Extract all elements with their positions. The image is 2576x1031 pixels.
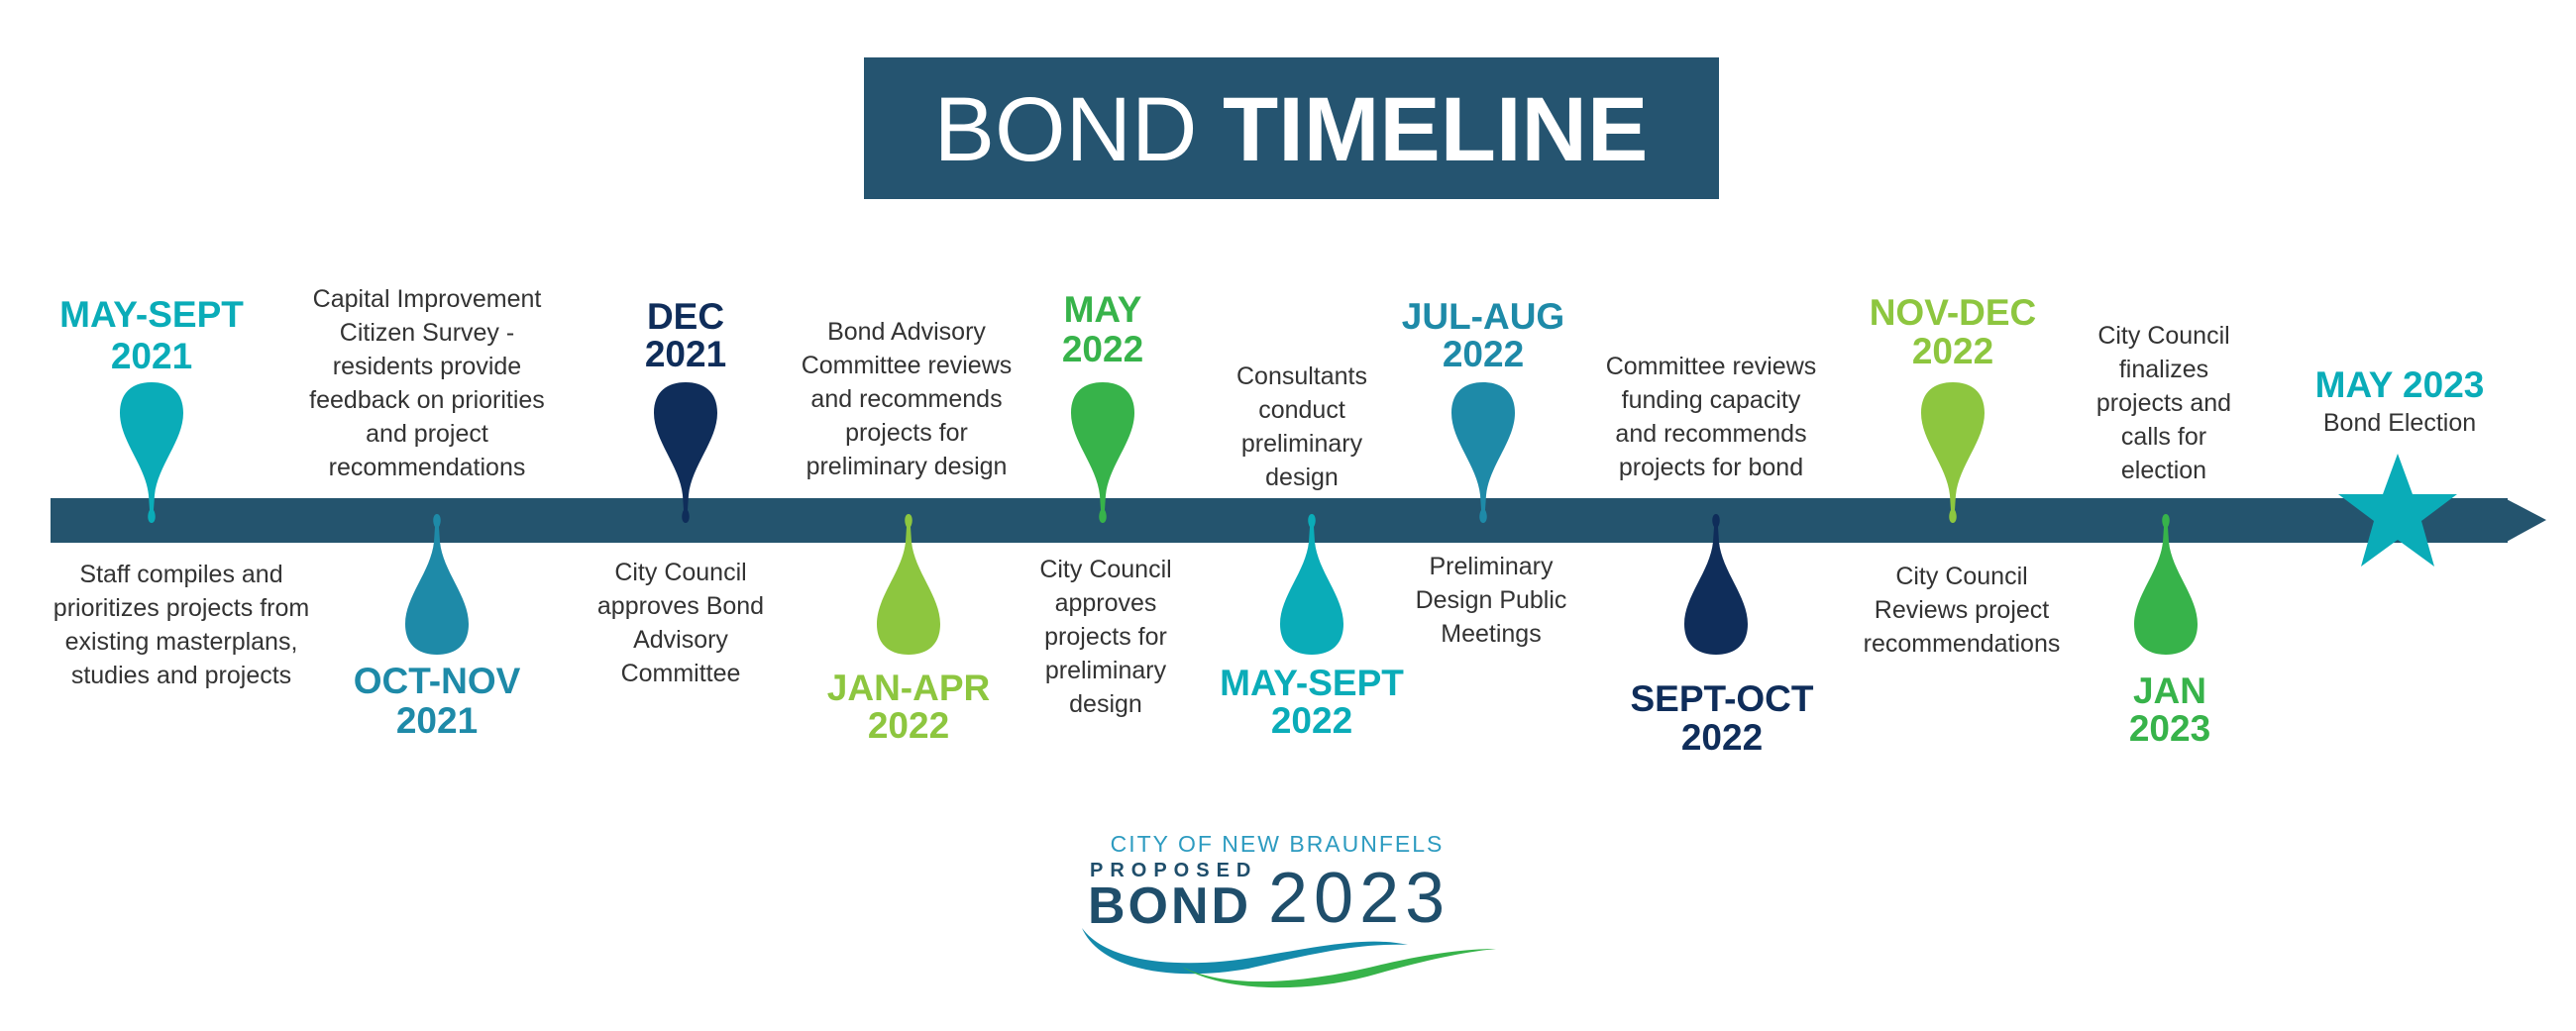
logo: Proposed Bond 2023 [1082, 831, 1496, 987]
milestone: Dec 2021: Advisory [633, 626, 728, 654]
milestone: Jul-Aug 2022: Design Public [1416, 586, 1566, 614]
milestone: May-Sept 2021: 2021 [111, 336, 192, 376]
milestone: Oct-Nov 2021: feedback on priorities [309, 386, 545, 414]
milestone: Jan-Apr 2022: and recommends [810, 385, 1003, 413]
title [864, 57, 1719, 199]
milestone: May-Sept 2022: 2022 [1271, 700, 1352, 741]
milestone: Jan 2023 [2096, 322, 2231, 749]
milestone: Jan 2023: 2023 [2129, 708, 2210, 749]
milestone: Sept-Oct 2022: and recommends [1615, 420, 1807, 448]
milestone: May 2022: 2022 [1062, 329, 1143, 369]
milestone: May 2022: City Council [1039, 556, 1172, 583]
milestone: Jan 2023: calls for [2121, 423, 2206, 451]
milestone: Jan-Apr 2022: projects for [845, 419, 968, 447]
milestone: Dec 2021 [597, 296, 764, 687]
milestone: May-Sept 2022: conduct [1258, 396, 1345, 424]
logo: Proposed Bond 2023: BOND [1088, 877, 1251, 935]
milestone: Jan 2023: projects and [2096, 389, 2231, 417]
milestone: Sept-Oct 2022: Committee reviews [1606, 353, 1816, 380]
milestone: Jan 2023: finalizes [2119, 356, 2208, 383]
milestone: May-Sept 2021: prioritizes projects from [54, 594, 309, 622]
milestone: Nov-Dec 2022: Reviews project [1875, 596, 2049, 624]
milestone: May 2022: projects for [1044, 623, 1167, 651]
milestone: May-Sept 2021: existing masterplans, [65, 628, 297, 656]
milestone: Nov-Dec 2022 [1864, 292, 2060, 658]
milestone: Sept-Oct 2022: SEPT-OCT [1630, 678, 1814, 719]
milestone: Jan-Apr 2022: Bond Advisory [827, 318, 986, 346]
milestone: Jul-Aug 2022: Meetings [1441, 620, 1542, 648]
milestone: Jan 2023: City Council [2097, 322, 2230, 350]
milestone: Dec 2021: Committee [621, 660, 740, 687]
milestone: May-Sept 2021 [54, 294, 309, 689]
milestone: May 2022: design [1069, 690, 1142, 718]
milestone: Oct-Nov 2021: recommendations [329, 454, 525, 481]
milestone: Jul-Aug 2022: 2022 [1443, 334, 1524, 374]
milestone: Jan-Apr 2022: JAN-APR [827, 668, 990, 708]
milestone: Oct-Nov 2021: OCT-NOV [354, 661, 521, 701]
logo: Proposed Bond 2023: 2023 [1268, 859, 1450, 938]
milestone: Dec 2021: 2021 [645, 334, 726, 374]
logo: Proposed Bond 2023: CITY OF NEW BRAUNFELS [1111, 831, 1444, 857]
milestone: Sept-Oct 2022 [1606, 353, 1816, 758]
milestone: Nov-Dec 2022: City Council [1895, 563, 2028, 590]
milestone: Nov-Dec 2022: NOV-DEC [1870, 292, 2036, 333]
milestone: May 2023 bond election: MAY 2023 [2315, 364, 2484, 405]
milestone: May-Sept 2022: MAY-SEPT [1220, 663, 1404, 703]
icon: star [2338, 454, 2457, 567]
milestone: Jul-Aug 2022: Preliminary [1429, 553, 1554, 580]
milestone: May-Sept 2022: design [1265, 464, 1339, 491]
milestone: Oct-Nov 2021: residents provide [333, 353, 521, 380]
milestone: Dec 2021: DEC [647, 296, 724, 337]
milestone: Oct-Nov 2021: 2021 [396, 700, 478, 741]
milestone: Oct-Nov 2021: and project [366, 420, 488, 448]
milestone: Jan-Apr 2022: 2022 [868, 705, 949, 746]
logo: Proposed Bond 2023: PROPOSED [1090, 860, 1257, 881]
milestone: Jul-Aug 2022: JUL-AUG [1402, 296, 1564, 337]
milestone: Jan-Apr 2022: preliminary design [806, 453, 1007, 480]
milestone: May-Sept 2022: preliminary [1241, 430, 1363, 458]
milestone: Dec 2021: City Council [614, 559, 747, 586]
milestone: May 2023 bond election: Bond Election [2323, 409, 2476, 437]
milestone: Jul-Aug 2022 [1402, 296, 1566, 648]
milestone: May 2022: preliminary [1045, 657, 1167, 684]
milestone: May-Sept 2021: studies and projects [71, 662, 291, 689]
title: BOND TIMELINE [934, 79, 1648, 180]
milestone: Jan-Apr 2022 [802, 318, 1012, 746]
milestone: May 2022: approves [1055, 589, 1156, 617]
milestone: May-Sept 2022 [1220, 362, 1404, 741]
milestone: Nov-Dec 2022: recommendations [1864, 630, 2060, 658]
milestone: May 2022 [1039, 289, 1172, 718]
timeline bar arrow [51, 498, 2546, 543]
milestone: May 2022: MAY [1064, 289, 1142, 330]
milestone: May-Sept 2022: Consultants [1236, 362, 1367, 390]
milestone: Jan-Apr 2022: Committee reviews [802, 352, 1012, 379]
milestone: Sept-Oct 2022: projects for bond [1619, 454, 1803, 481]
milestone: Sept-Oct 2022: funding capacity [1622, 386, 1801, 414]
milestone: Jan 2023: JAN [2133, 670, 2206, 711]
milestone: Oct-Nov 2021 [309, 285, 545, 741]
milestone: Oct-Nov 2021: Capital Improvement [313, 285, 541, 313]
milestone: Oct-Nov 2021: Citizen Survey - [340, 319, 514, 347]
milestone: May-Sept 2021: MAY-SEPT [59, 294, 244, 335]
milestone: Sept-Oct 2022: 2022 [1681, 717, 1763, 758]
milestone: May-Sept 2021: Staff compiles and [79, 561, 283, 588]
milestone: May 2023 bond election [2315, 364, 2484, 567]
milestone: Dec 2021: approves Bond [597, 592, 764, 620]
milestone: Nov-Dec 2022: 2022 [1912, 331, 1993, 371]
milestone: Jan 2023: election [2121, 457, 2206, 484]
